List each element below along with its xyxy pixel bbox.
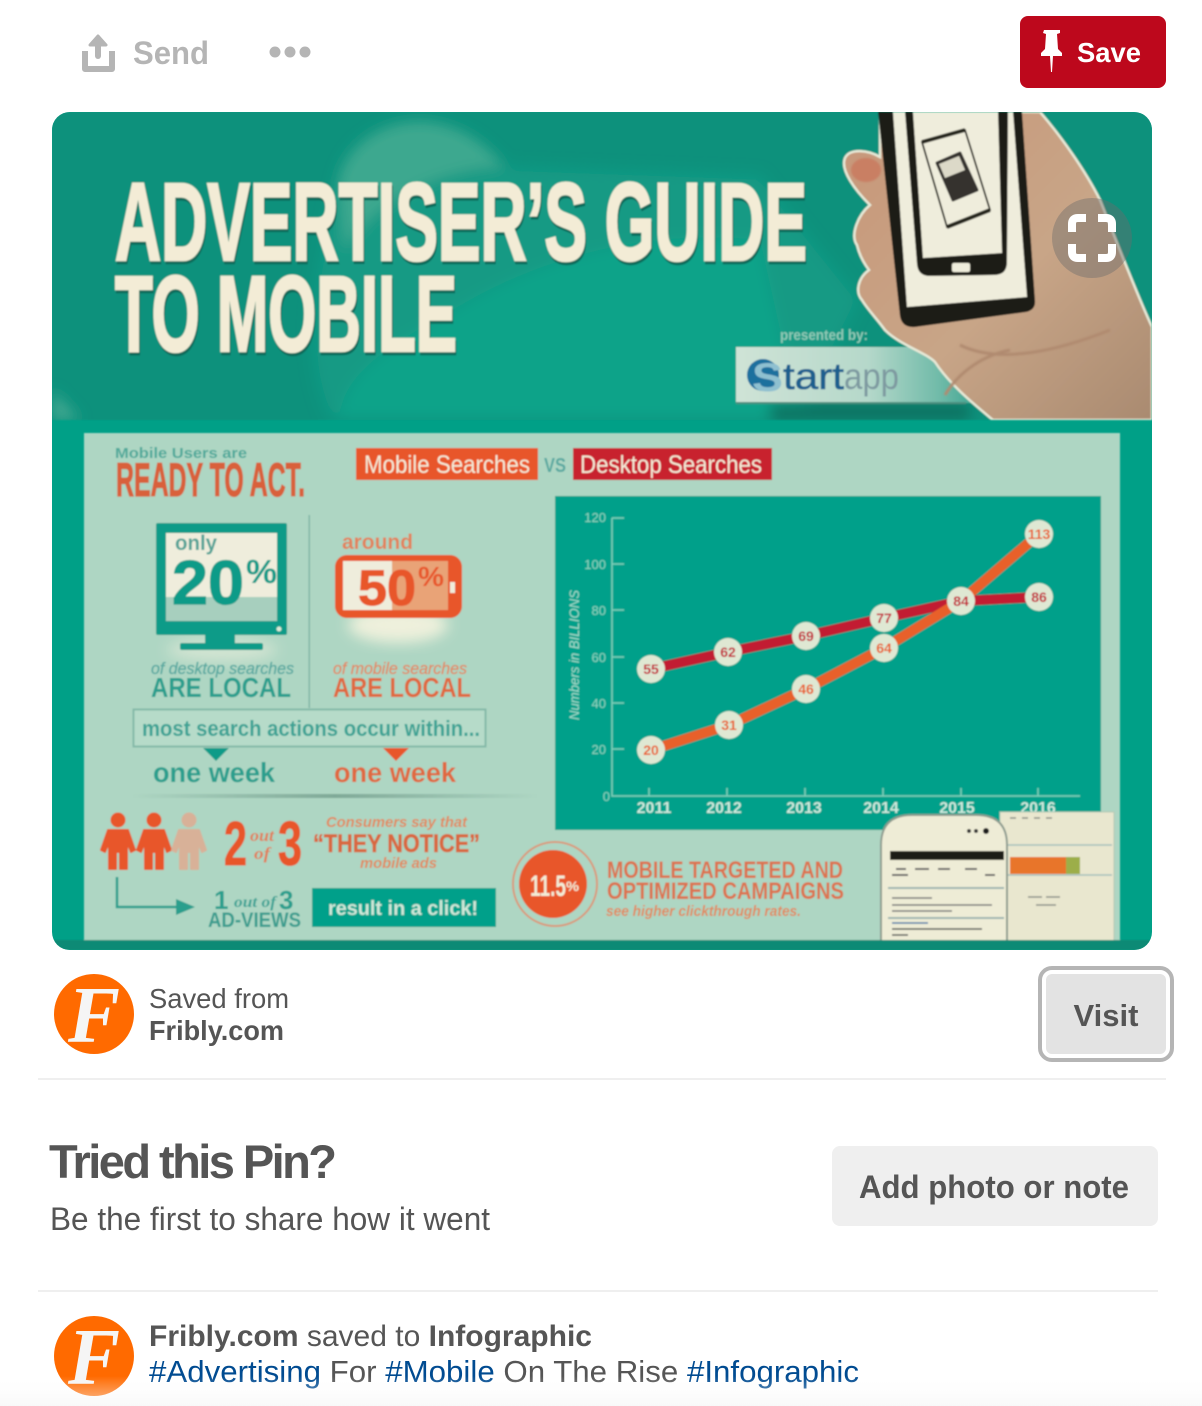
screenshot: tablet search page bbox=[1000, 812, 1114, 947]
desktop data labels: 69 bbox=[798, 628, 814, 644]
mobile data labels: 64 bbox=[876, 640, 892, 656]
hand bbox=[844, 112, 1152, 420]
legend: mobile vs desktop searches: Mobile Searches bbox=[364, 451, 530, 479]
desktop data labels: 77 bbox=[876, 610, 892, 626]
x axis labels: 2014 bbox=[863, 800, 899, 817]
screenshot: phone search page bbox=[881, 815, 1007, 950]
heading: ready to act: READY TO ACT. bbox=[116, 453, 305, 506]
stat: 1 out of 3 ad-views: out of bbox=[234, 894, 278, 911]
arrow: people to ad-views bbox=[117, 877, 195, 915]
stat: 2 out of 3: out bbox=[250, 826, 275, 845]
stat: desktop 20 percent monitor: only bbox=[175, 532, 217, 555]
stat: 11.5 percent badge: % bbox=[566, 878, 580, 894]
callout: most search actions: most search actions occur within... bbox=[142, 716, 480, 741]
desktop series line bbox=[651, 597, 1039, 669]
text: targeted campaigns: OPTIMIZED CAMPAIGNS bbox=[607, 878, 844, 905]
startapp logo plate: tart bbox=[783, 356, 845, 397]
glow under monitor bbox=[167, 638, 277, 662]
desktop data labels: 84 bbox=[953, 593, 969, 609]
icon: small phone on screen bbox=[922, 130, 990, 227]
mobile data labels: 113 bbox=[1028, 526, 1051, 542]
stat: desktop 20 percent monitor: 20 bbox=[172, 549, 244, 618]
text: targeted campaigns: see higher clickthrough rates. bbox=[606, 903, 801, 920]
glow under phone bbox=[348, 607, 448, 643]
stat: 1 out of 3 ad-views bbox=[208, 890, 301, 928]
background blurred hand shapes bbox=[52, 121, 970, 420]
icon: logo globe bbox=[747, 359, 779, 391]
text: they notice mobile ads: mobile ads bbox=[360, 855, 437, 872]
phone held in hand bbox=[878, 112, 1035, 327]
callout: result in a click: result in a click! bbox=[328, 898, 478, 920]
x axis labels: 2011 bbox=[637, 800, 671, 817]
y axis labels: 40 bbox=[592, 696, 606, 711]
desktop data labels: 55 bbox=[643, 661, 659, 677]
presented by text: presented by: bbox=[780, 327, 868, 344]
add photo button bbox=[832, 1146, 1158, 1226]
y axis labels: 100 bbox=[584, 557, 606, 572]
icon: more options dots bbox=[270, 46, 310, 58]
x axis labels: 2013 bbox=[786, 800, 822, 817]
saved to line: Fribly.com saved to Infographic bbox=[149, 1320, 592, 1353]
y axis labels: 20 bbox=[592, 742, 606, 757]
stat: mobile 50 percent phone: around bbox=[342, 531, 413, 554]
stat: 2 out of 3 bbox=[224, 820, 302, 867]
source row bbox=[54, 972, 289, 1060]
save label: Save bbox=[1077, 37, 1141, 68]
mobile data labels: 31 bbox=[721, 717, 737, 733]
stat: 1 out of 3 ad-views: AD-VIEWS bbox=[208, 909, 301, 932]
stat: desktop 20 percent monitor: % bbox=[246, 553, 277, 590]
icon: fullscreen brackets bbox=[1072, 218, 1112, 258]
x axis labels: 2015 bbox=[939, 800, 975, 817]
stat: 2 out of 3: 3 bbox=[278, 810, 302, 879]
chart: mobile vs desktop searches bbox=[555, 496, 1101, 830]
mobile data labels: 46 bbox=[798, 681, 814, 697]
legend: mobile vs desktop searches bbox=[356, 448, 772, 480]
desktop data labels bbox=[643, 589, 1047, 677]
stat: 2 out of 3: of bbox=[254, 844, 273, 863]
title: TO MOBILE bbox=[115, 253, 457, 374]
x axis labels: 2016 bbox=[1020, 800, 1056, 817]
mobile series line bbox=[651, 534, 1039, 750]
toolbar: send action bbox=[85, 35, 209, 71]
title bbox=[114, 180, 807, 357]
startapp logo plate: app bbox=[844, 356, 899, 397]
icon: fribly logo bbox=[54, 1314, 134, 1402]
stat: 1 out of 3 ad-views: 3 bbox=[279, 885, 293, 915]
stat: mobile 50 percent phone bbox=[333, 531, 471, 703]
y axis labels: 120 bbox=[584, 510, 606, 525]
infographic image card bbox=[52, 112, 1152, 950]
icon: fribly logo: F bbox=[67, 972, 120, 1060]
stat: mobile 50 percent phone: ARE LOCAL bbox=[333, 672, 471, 703]
stat: 11.5 percent badge bbox=[513, 842, 597, 926]
chart axes bbox=[612, 518, 1080, 796]
icon: monitor bbox=[156, 523, 287, 650]
visit button: Visit bbox=[1074, 998, 1138, 1033]
saved-by row bbox=[54, 1314, 859, 1402]
desktop data labels: 86 bbox=[1031, 589, 1047, 605]
heading: ready to act: Mobile Users are bbox=[115, 445, 247, 462]
data points bbox=[637, 520, 1053, 764]
text: they notice mobile ads bbox=[313, 814, 480, 872]
heading: ready to act bbox=[115, 446, 304, 498]
send label: Send bbox=[133, 35, 209, 71]
stat: mobile 50 percent phone: 50 bbox=[358, 560, 416, 616]
icon: landscape phone bbox=[335, 555, 462, 618]
save button bbox=[1020, 16, 1166, 88]
heading: tried this pin: Tried this Pin? bbox=[49, 1135, 337, 1188]
icon: share tray and arrow bbox=[85, 36, 112, 69]
y axis labels: 60 bbox=[592, 650, 606, 665]
source name: Fribly.com bbox=[149, 1015, 284, 1046]
one week results: one week bbox=[334, 757, 456, 788]
text: they notice mobile ads: “THEY NOTICE” bbox=[313, 830, 480, 858]
desktop data labels: 62 bbox=[720, 644, 736, 660]
text: targeted campaigns: MOBILE TARGETED AND bbox=[607, 857, 843, 884]
one week results: one week bbox=[153, 757, 275, 788]
x axis labels: 2012 bbox=[706, 800, 742, 817]
fullscreen button bbox=[1052, 198, 1132, 278]
mobile data labels: 20 bbox=[643, 742, 659, 758]
stat: desktop 20 percent monitor bbox=[151, 523, 294, 703]
mobile data labels bbox=[643, 526, 1051, 758]
panel: header banner bbox=[52, 112, 1152, 420]
legend: mobile vs desktop searches: Desktop Searches bbox=[580, 451, 762, 479]
logo wordmark: S bbox=[752, 356, 783, 400]
title: TO MOBILE bbox=[116, 256, 458, 377]
callout: result in a click bbox=[312, 888, 496, 927]
description with hashtags: #Advertising For #Mobile On The Rise #Infographic bbox=[149, 1354, 859, 1389]
stat: desktop 20 percent monitor: of desktop searches bbox=[151, 659, 294, 678]
stat: 1 out of 3 ad-views: 1 bbox=[214, 885, 228, 915]
stat: mobile 50 percent phone: of mobile searches bbox=[333, 659, 467, 678]
y axis labels: 0 bbox=[603, 789, 610, 804]
stat: desktop 20 percent monitor: ARE LOCAL bbox=[151, 672, 291, 703]
subheading: be the first: Be the first to share how it went bbox=[50, 1201, 490, 1237]
one week results bbox=[153, 748, 456, 788]
stat: mobile 50 percent phone: % bbox=[418, 561, 444, 592]
panel: light content area bbox=[84, 433, 1120, 940]
bottom strip bbox=[52, 940, 1152, 950]
text: they notice mobile ads: Consumers say that bbox=[326, 814, 468, 831]
visit button bbox=[1040, 968, 1172, 1060]
people icons: 2 of 3 bbox=[101, 814, 206, 869]
x axis labels bbox=[636, 800, 1057, 814]
y axis title: Numbers in BILLIONS bbox=[566, 589, 582, 720]
saved from text: Saved from bbox=[149, 983, 289, 1014]
startapp logo plate bbox=[736, 347, 976, 404]
callout: most search actions bbox=[134, 710, 486, 746]
icon: pin bbox=[1041, 30, 1062, 72]
y axis labels bbox=[584, 510, 610, 804]
legend: mobile vs desktop searches: VS bbox=[544, 455, 566, 477]
icon: fribly logo: F bbox=[67, 1314, 120, 1402]
text: targeted campaigns bbox=[606, 857, 844, 920]
stat: 11.5 percent badge: 11.5 bbox=[530, 870, 566, 903]
icon: fribly logo bbox=[54, 972, 134, 1060]
add photo button: Add photo or note bbox=[859, 1169, 1129, 1205]
stat: 2 out of 3: 2 bbox=[224, 810, 247, 879]
y axis labels: 80 bbox=[592, 603, 606, 618]
